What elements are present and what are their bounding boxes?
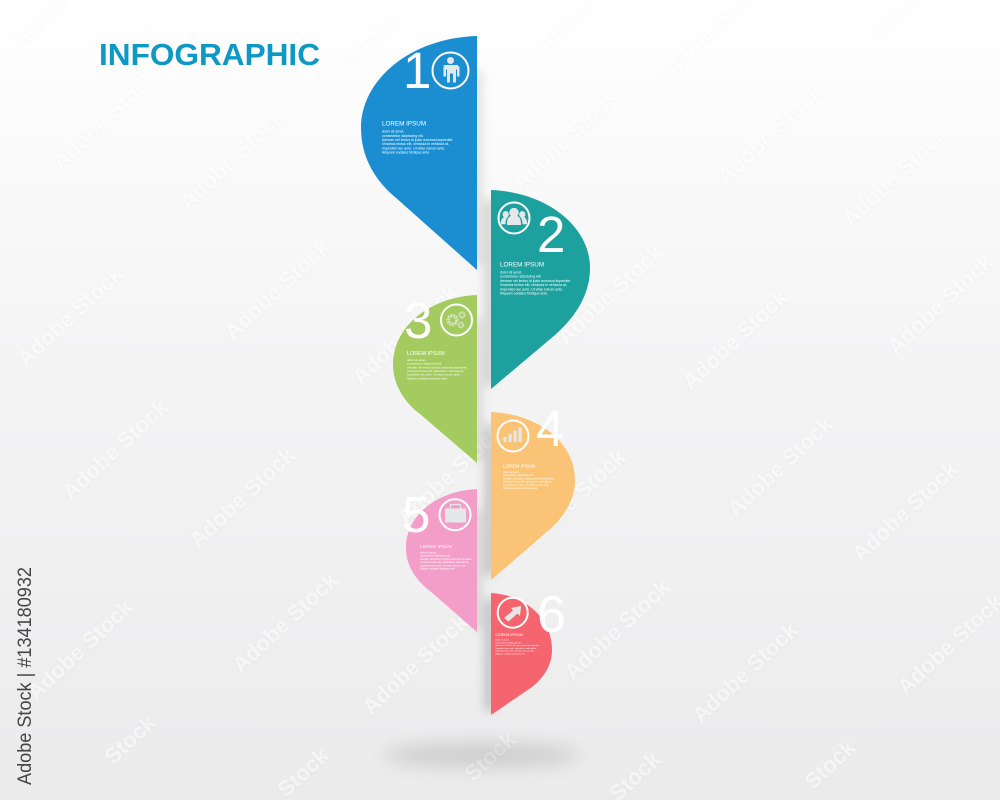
text block: consectetur adipiscing elit. — [382, 134, 424, 138]
text block: Aenean vel lectus id justo euismod imperdiet. — [500, 279, 571, 283]
text block: Aliquam sodales tristique ante — [382, 151, 429, 155]
icon: arrow — [498, 598, 528, 628]
text block: Aenean vel lectus id justo euismod imperdiet. — [407, 365, 467, 369]
icon: gears — [441, 304, 472, 336]
panel 1: blue — [361, 36, 477, 270]
text block: imperdiet nec ante. Ut vitae rutrum ante. — [496, 650, 535, 653]
watermark pattern: Adobe Stock — [515, 444, 631, 555]
watermark pattern: Stock — [799, 734, 861, 794]
watermark pattern: Adobe Stock — [12, 261, 128, 372]
watermark pattern: Adobe — [336, 7, 403, 72]
text block: LOREM IPSUM — [500, 262, 544, 268]
watermark pattern: Stock — [99, 709, 161, 769]
text block: Vivamus lectus elit, vehicula in vehicula at, — [407, 369, 464, 373]
icon: briefcase — [440, 499, 470, 530]
text block: LOREM IPSUM — [407, 351, 445, 357]
text block: imperdiet nec ante. Ut vitae rutrum ante. — [500, 287, 563, 291]
watermark pattern: Adobe Stock — [377, 64, 493, 175]
text block: Vivamus lectus elit, vehicula in vehicula at, — [500, 283, 567, 287]
number 4: 4 — [536, 400, 564, 457]
text block: Aenean vel lectus id justo euismod imperdiet. — [496, 644, 540, 647]
floor shadow — [384, 743, 580, 767]
stock credit: Adobe Stock | #134180932 — [15, 567, 36, 785]
watermark pattern: Adobe Stock — [847, 456, 963, 567]
watermark pattern: Adobe Stock — [219, 234, 335, 345]
icon: bar chart — [498, 420, 528, 452]
watermark pattern: Adobe Stock — [347, 279, 463, 390]
watermark pattern: Adobe Stock — [57, 394, 173, 505]
panel 4: orange — [491, 400, 575, 580]
watermark pattern: Adobe Stock — [552, 239, 668, 350]
watermark pattern: Adobe Stock — [47, 64, 163, 175]
panel 2: teal — [491, 190, 590, 389]
text block — [420, 544, 472, 570]
text block — [407, 351, 467, 380]
number 2: 2 — [537, 206, 565, 263]
text block: imperdiet nec ante. Ut vitae rutrum ante. — [382, 146, 445, 150]
panel 6: red — [491, 586, 566, 715]
number 6: 6 — [537, 586, 566, 644]
watermark pattern: Adobe Stock — [174, 104, 290, 215]
watermark pattern: Adobe Stock — [507, 84, 623, 195]
watermark pattern: Adobe Stock — [677, 284, 793, 395]
text block: consectetur adipiscing elit. — [500, 275, 542, 279]
text block: Aliquam sodales tristique ante — [500, 292, 547, 296]
text block: consectetur adipiscing elit. — [503, 473, 534, 477]
watermark pattern: Adobe Stock — [357, 609, 473, 720]
text block: Vivamus lectus elit, vehicula in vehicula at, — [382, 142, 449, 146]
text block: dolor sit amet, — [382, 130, 404, 134]
icon: person — [432, 52, 468, 88]
text block: Aliquam sodales tristique ante — [420, 566, 455, 570]
watermark pattern: Adobe Stock — [687, 617, 803, 728]
panel shadows — [474, 70, 493, 710]
text block: LOREM IPSUM — [503, 464, 535, 468]
watermark pattern: Adobe Stock — [722, 411, 838, 522]
text block: dolor sit amet, — [420, 550, 437, 554]
text block: imperdiet nec ante. Ut vitae rutrum ante. — [407, 373, 461, 377]
watermark pattern: Adobe Stock — [559, 574, 675, 685]
text block: imperdiet nec ante. Ut vitae rutrum ante. — [420, 563, 467, 567]
text block: dolor sit amet, — [500, 270, 522, 274]
watermark pattern: Adobe Stock — [837, 121, 953, 232]
text block: consectetur adipiscing elit. — [420, 554, 451, 558]
number 5: 5 — [402, 486, 430, 543]
text block: Aliquam sodales tristique ante — [503, 486, 538, 490]
panel 5: pink — [402, 486, 477, 632]
watermark pattern: Adobe Stock — [22, 594, 138, 705]
text block: LOREM IPSUM — [420, 544, 452, 549]
text block: Aenean vel lectus id justo euismod imperdiet. — [382, 138, 453, 142]
text block — [500, 262, 571, 296]
text block — [496, 632, 540, 656]
title: INFOGRAPHIC — [99, 37, 320, 72]
text block: Aenean vel lectus id justo euismod imperdiet. — [503, 476, 555, 480]
text block: Aenean vel lectus id justo euismod imperdiet. — [420, 557, 472, 561]
watermark pattern: Stock — [459, 726, 521, 786]
icon: group of people — [498, 202, 530, 234]
text block: dolor sit amet, — [496, 638, 510, 642]
watermark pattern: Adobe Stock — [392, 419, 508, 530]
text block — [382, 120, 453, 155]
number 1: 1 — [403, 42, 431, 99]
text block: dolor sit amet, — [503, 470, 520, 474]
text block: Aliquam sodales tristique ante — [496, 652, 525, 656]
text block: imperdiet nec ante. Ut vitae rutrum ante. — [503, 483, 550, 487]
text block: Vivamus lectus elit, vehicula in vehicula at, — [420, 560, 469, 564]
text block: Vivamus lectus elit, vehicula in vehicula at, — [496, 647, 537, 650]
watermark pattern: Adobe Stock — [712, 79, 828, 190]
text block: consectetur adipiscing elit. — [496, 641, 522, 644]
text block — [503, 464, 555, 490]
text block: Vivamus lectus elit, vehicula in vehicula at, — [503, 480, 552, 484]
watermark pattern: Adobe Stock — [882, 249, 998, 360]
text block: LOREM IPSUM — [496, 632, 523, 637]
watermark pattern: Adobe Stock — [227, 567, 343, 678]
text block: Aliquam sodales tristique ante — [407, 376, 447, 380]
text block: consectetur adipiscing elit. — [407, 362, 442, 366]
text block: dolor sit amet, — [407, 358, 426, 362]
number 3: 3 — [404, 292, 432, 349]
watermark pattern: Adobe Stock — [184, 442, 300, 553]
panel 3: green — [393, 292, 477, 463]
text block: LOREM IPSUM — [382, 120, 426, 128]
